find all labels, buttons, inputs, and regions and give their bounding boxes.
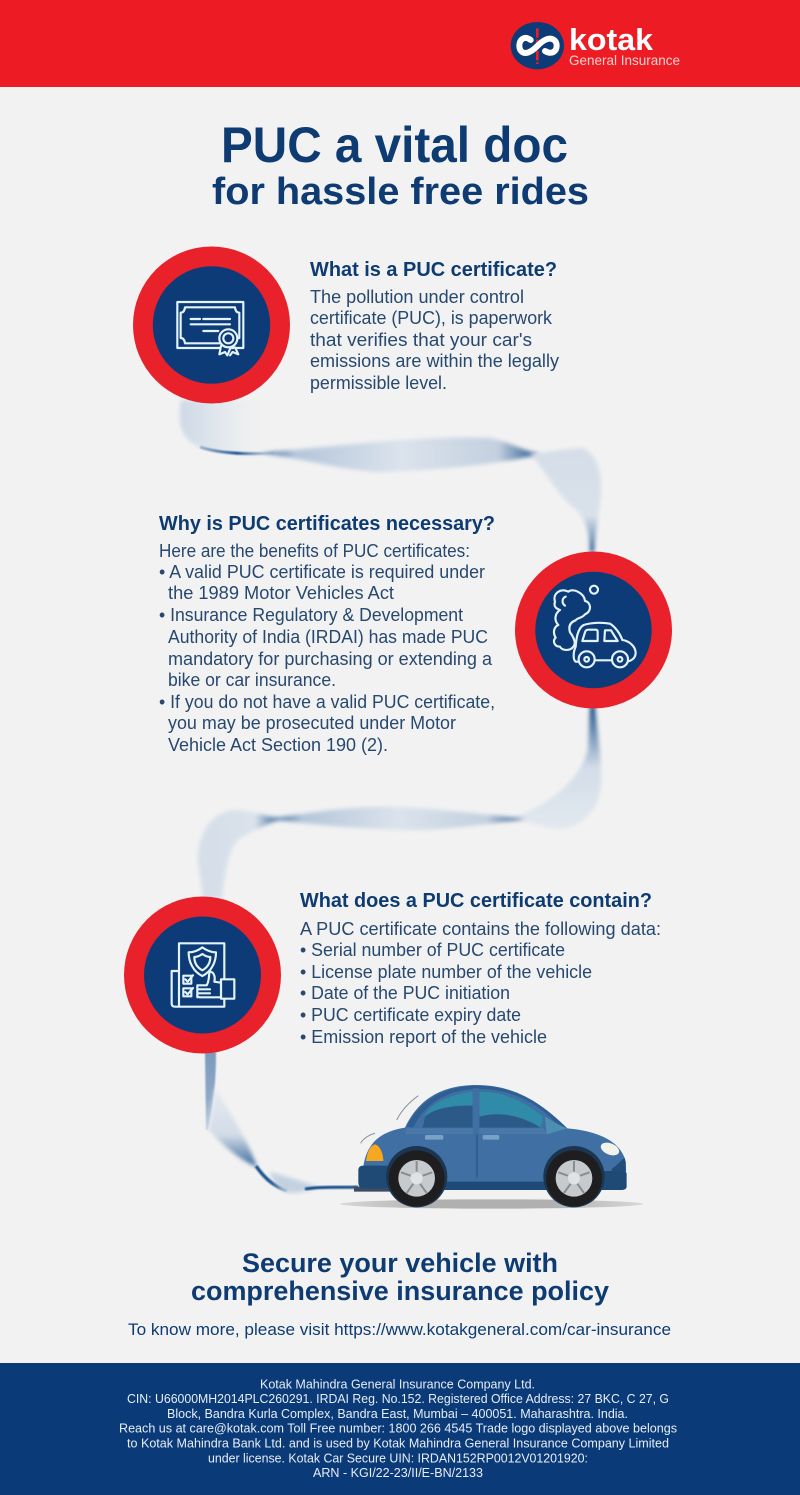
text block: you may be prosecuted under Motor [168, 713, 456, 733]
text block: Here are the benefits of PUC certificates: [159, 541, 470, 561]
smoke ribbon: middle [198, 706, 601, 899]
text block: the 1989 Motor Vehicles Act [168, 583, 394, 603]
text block [310, 287, 559, 393]
smoke ribbon: top [180, 400, 601, 552]
text block [159, 541, 495, 755]
logo wordmark: kotak [569, 22, 654, 57]
footer legal text: Kotak Mahindra General Insurance Company Ltd. [260, 1378, 535, 1392]
text block: A PUC certificate contains the following data: [300, 919, 661, 939]
text block: • Date of the PUC initiation [300, 983, 510, 1003]
icon: blue car [340, 1085, 643, 1209]
title: PUC a vital doc [221, 117, 568, 173]
title: for hassle free rides [212, 171, 589, 213]
text block: The pollution under control [310, 287, 524, 307]
panel: what is a PUC certificate [133, 246, 559, 404]
text block: certificate (PUC), is paperwork [310, 308, 553, 328]
text block: that verifies that your car's [310, 330, 532, 350]
footer legal text: to Kotak Mahindra Bank Ltd. and is used by Kotak Mahindra General Insurance Company Limited [127, 1436, 669, 1450]
text block: permissible level. [310, 373, 447, 393]
icon: car emitting smoke [515, 552, 672, 708]
text block: mandatory for purchasing or extending a [168, 649, 493, 669]
call to action heading [191, 1248, 609, 1306]
heading: What is a PUC certificate? [310, 259, 557, 281]
call to action heading: comprehensive insurance policy [191, 1276, 609, 1306]
panel: why PUC is necessary [159, 513, 672, 755]
footer legal text: Reach us at care@kotak.com Toll Free number: 1800 266 4545 Trade logo displayed above belongs [119, 1422, 677, 1436]
text block: • Emission report of the vehicle [300, 1027, 547, 1047]
heading: What does a PUC certificate contain? [300, 890, 652, 912]
icon: kotak logo [511, 22, 564, 69]
panel: what a PUC certificate contains [124, 890, 661, 1054]
icon: document with shield and thumbs up [124, 896, 281, 1054]
text block: Vehicle Act Section 190 (2). [168, 735, 388, 755]
logo subtitle: General Insurance [569, 52, 680, 68]
header band with logo [0, 0, 800, 87]
call to action heading: Secure your vehicle with [242, 1248, 558, 1278]
text block: Authority of India (IRDAI) has made PUC [168, 627, 488, 647]
footer legal text: CIN: U66000MH2014PLC260291. IRDAI Reg. No.152. Registered Office Address: 27 BKC, C 27, G [127, 1392, 669, 1406]
title [212, 117, 589, 213]
footer legal text: ARN - KGI/22-23/II/E-BN/2133 [313, 1466, 483, 1480]
text block: • Serial number of PUC certificate [300, 940, 565, 960]
text block: • A valid PUC certificate is required under [159, 562, 485, 582]
smoke ribbon: bottom [205, 1052, 358, 1193]
text block: • Insurance Regulatory & Development [159, 605, 463, 625]
text block: emissions are within the legally [310, 351, 559, 371]
text block: bike or car insurance. [168, 670, 336, 690]
icon: certificate [133, 246, 290, 404]
heading: Why is PUC certificates necessary? [159, 513, 495, 535]
footer legal text: Block, Bandra Kurla Complex, Bandra East, Mumbai – 400051. Maharashtra. India. [167, 1407, 628, 1421]
footer band [0, 1363, 800, 1495]
footer legal text [119, 1378, 677, 1480]
text block [300, 919, 661, 1047]
footer legal text: under license. Kotak Car Secure UIN: IRDAN152RP0012V01201920: [208, 1452, 588, 1466]
text block: • PUC certificate expiry date [300, 1005, 521, 1025]
text block: • If you do not have a valid PUC certificate, [159, 692, 495, 712]
text block: • License plate number of the vehicle [300, 962, 592, 982]
website line: To know more, please visit https://www.kotakgeneral.com/car-insurance [128, 1320, 671, 1339]
